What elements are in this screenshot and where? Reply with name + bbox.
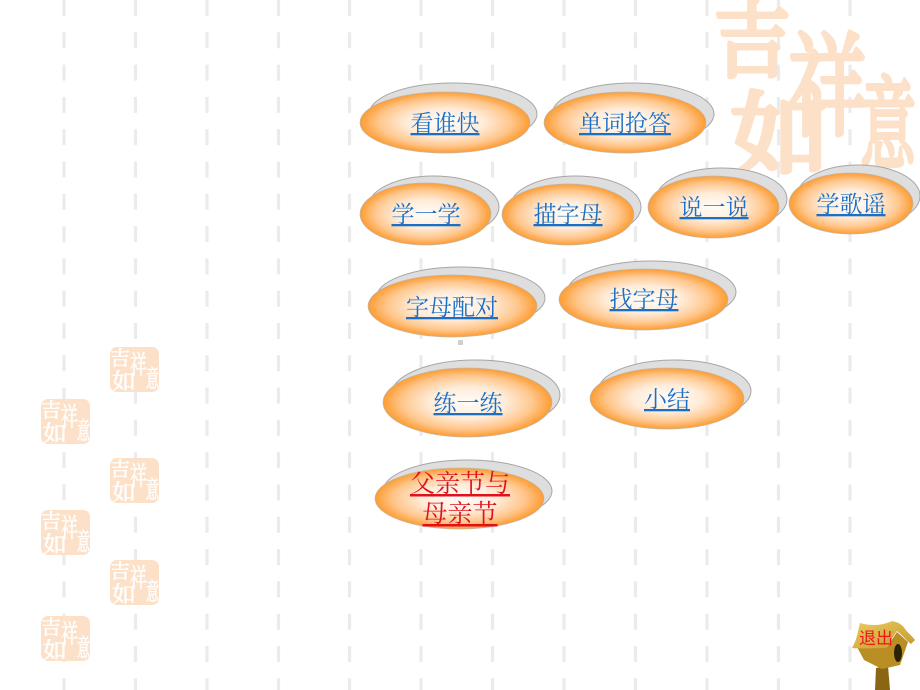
button: 学歌谣 <box>789 165 920 234</box>
small seal 2 <box>41 399 90 446</box>
small seal 3: 吉 <box>110 458 130 481</box>
button: 找字母: 找字母 <box>610 287 678 312</box>
button: 父亲节与母亲节: 父亲节与 <box>410 470 510 498</box>
small seal 5 <box>110 560 159 607</box>
small seal 4: 如 <box>43 532 67 557</box>
small seal 1: 如 <box>112 369 136 394</box>
small seal 1: 吉 <box>110 347 130 370</box>
small seal 5: 意 <box>146 579 159 606</box>
button: 描字母 <box>502 176 641 245</box>
small seal 3 <box>110 458 159 505</box>
button: 单词抢答 <box>544 83 714 153</box>
seal artwork: large auspicious characters: 如 <box>730 86 830 188</box>
small seal 3: 意 <box>146 477 159 504</box>
button: 学一学 <box>360 176 499 245</box>
seal artwork: large auspicious characters <box>714 0 916 188</box>
small marker dot <box>458 340 463 345</box>
button: 小结: 小结 <box>644 387 690 412</box>
button: 父亲节与母亲节: 母亲节 <box>422 500 498 528</box>
button: 找字母 <box>559 261 736 330</box>
small seal 6: 意 <box>77 635 90 662</box>
small seal 2: 吉 <box>41 399 61 422</box>
small seal 1 <box>110 347 159 394</box>
small seal 4: 吉 <box>41 510 61 533</box>
small seal 5: 祥 <box>130 564 147 593</box>
button: 小结 <box>590 360 751 429</box>
button: 描字母: 描字母 <box>534 202 602 227</box>
button: 学歌谣: 学歌谣 <box>816 192 886 217</box>
small seal 3: 如 <box>112 480 136 505</box>
small seal 4: 祥 <box>61 514 78 543</box>
button: 单词抢答: 单词抢答 <box>579 111 671 136</box>
small seal 4: 意 <box>77 529 90 556</box>
seal artwork: large auspicious characters: 祥 <box>788 27 868 151</box>
small seal 5: 如 <box>112 582 136 607</box>
small seal 6 <box>41 616 90 663</box>
small seal 4 <box>41 510 90 557</box>
button: 看谁快: 看谁快 <box>410 111 480 136</box>
button: 说一说: 说一说 <box>680 195 748 220</box>
button: 学一学: 学一学 <box>392 202 460 227</box>
button: 练一练 <box>383 360 560 437</box>
button: 说一说 <box>648 168 787 238</box>
small seal 2: 如 <box>43 421 67 446</box>
small seal 2: 意 <box>77 418 90 445</box>
small seal 6: 吉 <box>41 616 61 639</box>
button: 看谁快 <box>360 83 537 153</box>
small seal 6: 祥 <box>61 620 78 649</box>
icon: birdhouse exit button: 退出 <box>859 629 893 648</box>
small seal 5: 吉 <box>110 560 130 583</box>
button: 父亲节与母亲节 <box>375 460 552 529</box>
small seal 3: 祥 <box>130 462 147 491</box>
small seal 1: 意 <box>146 366 159 393</box>
small seal 6: 如 <box>43 638 67 663</box>
button: 练一练: 练一练 <box>434 391 504 416</box>
button: 字母配对: 字母配对 <box>406 295 498 320</box>
small seal 1: 祥 <box>130 351 147 380</box>
button: 字母配对 <box>368 267 545 337</box>
small seal 2: 祥 <box>61 403 78 432</box>
icon: birdhouse exit button <box>852 621 915 690</box>
